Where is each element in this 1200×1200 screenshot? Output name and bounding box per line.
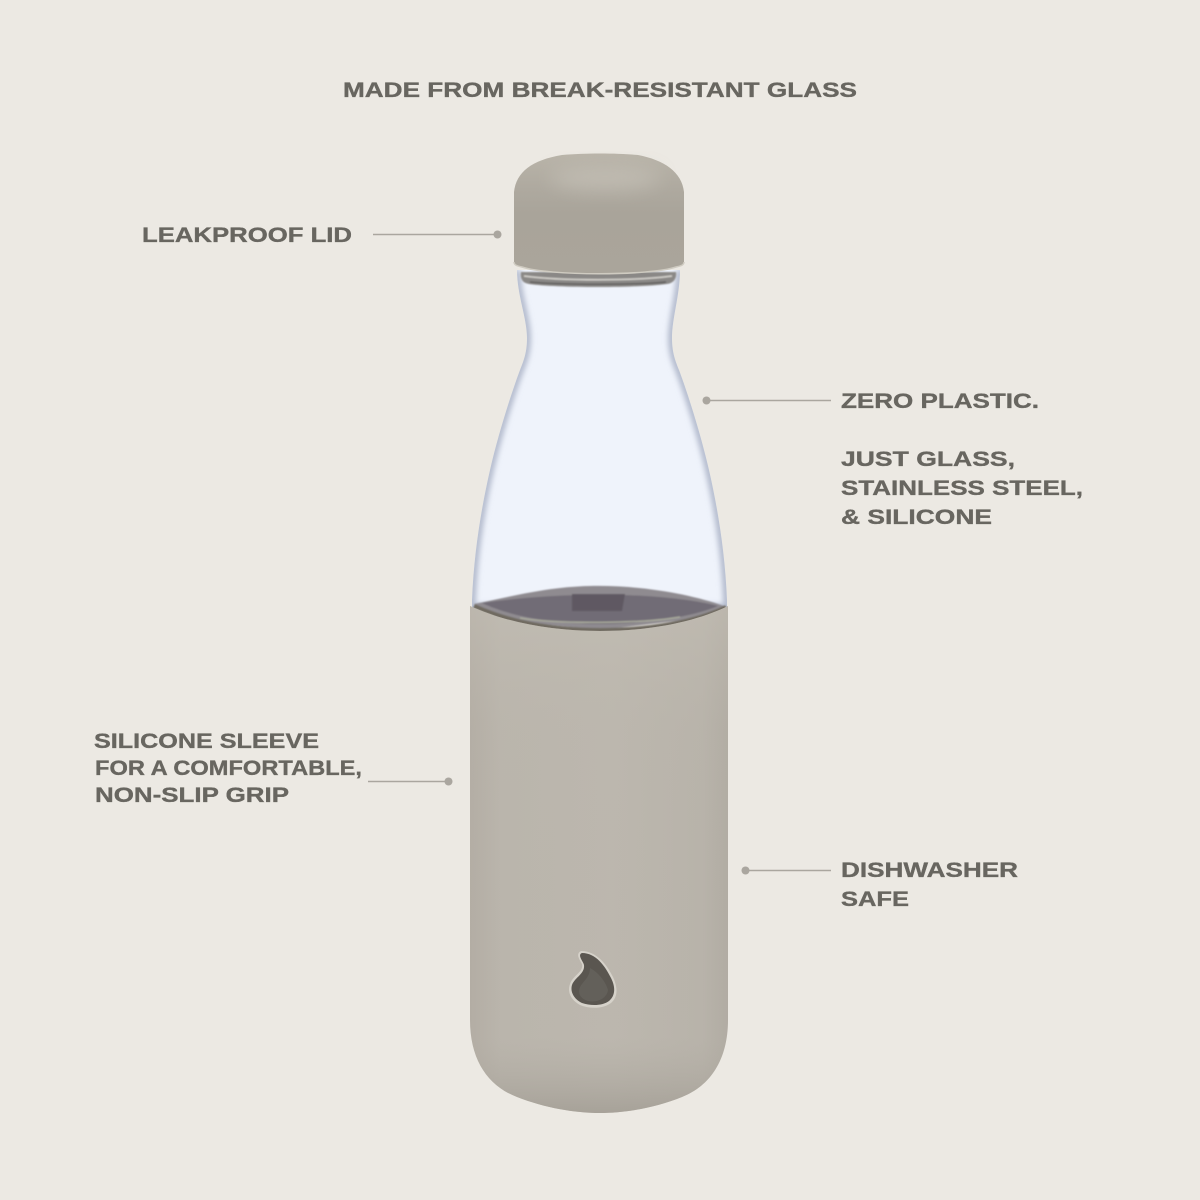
callout: leakproof lid: LEAKPROOF LID [142,224,352,247]
callout: zero plastic: & SILICONE [841,506,992,529]
title: MADE FROM BREAK-RESISTANT GLASS [343,79,857,102]
icon: drop logo [569,951,617,1008]
lid [514,154,684,274]
callout: silicone sleeve: SILICONE SLEEVE [94,730,319,753]
callout: zero plastic: STAINLESS STEEL, [841,477,1083,500]
callout: dishwasher safe: SAFE [841,888,909,911]
bottle glass body [472,270,727,608]
callout: zero plastic [702,390,1083,529]
callout: silicone sleeve: NON-SLIP GRIP [95,784,289,807]
callout: leakproof lid [142,224,502,247]
callout: zero plastic: ZERO PLASTIC. [841,390,1039,413]
callout: zero plastic: JUST GLASS, [841,448,1015,471]
sleeve [470,606,728,1113]
callout: dishwasher safe [742,859,1018,911]
callout: dishwasher safe: DISHWASHER [841,859,1018,882]
callout: silicone sleeve: FOR A COMFORTABLE, [95,757,362,780]
glass base [474,586,726,630]
callout: silicone sleeve [94,730,452,807]
bottle [460,154,740,1113]
neck ring [521,272,676,287]
